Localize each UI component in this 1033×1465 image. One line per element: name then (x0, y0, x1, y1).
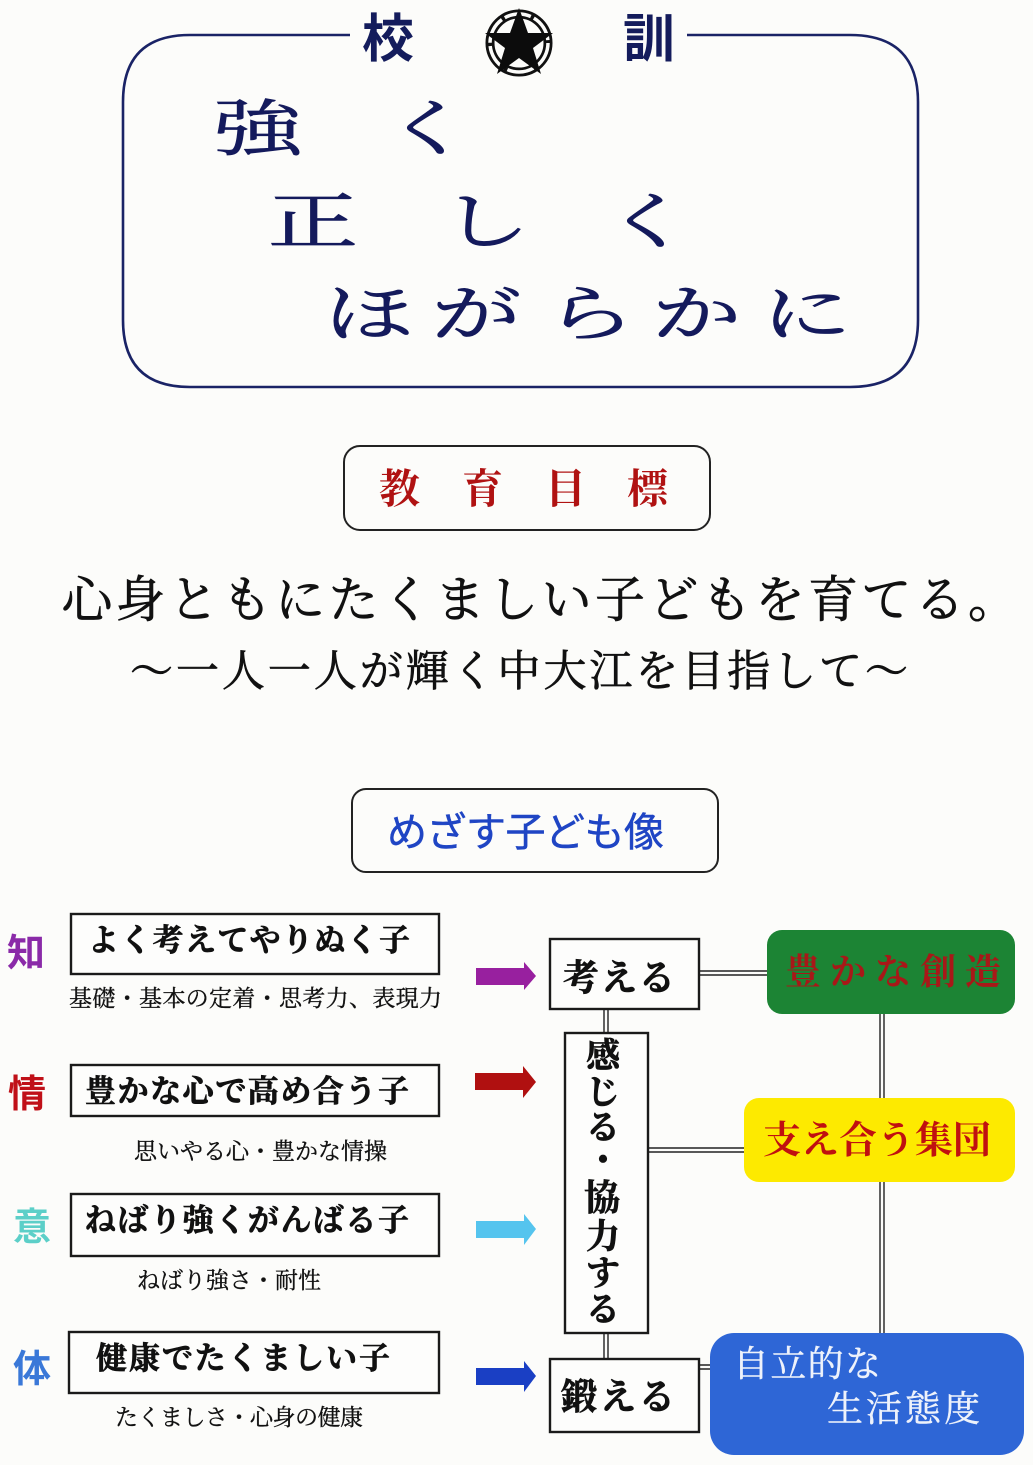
panel: 支え合う集団 (744, 1098, 1015, 1182)
heading box: めざす子ども像: めざす子ども像 (387, 811, 664, 855)
arrow (476, 1361, 536, 1392)
row: 情 (8, 1065, 536, 1164)
motto line 1: 強く (213, 95, 473, 164)
row: 意 (13, 1194, 536, 1293)
box: 考える: 考える (563, 958, 675, 998)
motto line 2: 正しく (268, 188, 693, 257)
box: 鍛える: 鍛える (561, 1377, 675, 1417)
row: 体 (13, 1332, 536, 1430)
caption: 基礎・基本の定着・思考力、表現力 (69, 986, 442, 1011)
box: 感じる・協力する: る (586, 1292, 620, 1329)
label 意: 意 (13, 1207, 51, 1249)
box: 考える (550, 939, 699, 1009)
box: 豊かな心で高め合う子 (71, 1065, 439, 1116)
row: 知 (7, 914, 536, 1011)
caption: 思いやる心・豊かな情操 (134, 1139, 387, 1164)
box: よく考えてやりぬく子 (71, 914, 439, 974)
box: 感じる・協力する: 感 (586, 1037, 623, 1075)
heading box: めざす子ども像 (352, 789, 718, 872)
heading: 訓: 訓 (623, 11, 675, 69)
box: 鍛える (550, 1359, 699, 1432)
arrow (476, 1214, 536, 1245)
panel: 豊かな創造: 豊かな創造 (785, 952, 1001, 992)
label 知: 知 (7, 933, 45, 975)
caption: ねばり強さ・耐性 (137, 1268, 321, 1293)
box: 感じる・協力する: る (586, 1110, 620, 1147)
connector lines (604, 971, 884, 1369)
label 情: 情 (8, 1074, 46, 1116)
caption: たくましさ・心身の健康 (115, 1405, 363, 1430)
box: ねばり強くがんばる子 (71, 1194, 439, 1256)
motto panel (123, 8, 918, 387)
arrow (476, 962, 536, 990)
panel: 支え合う集団: 支え合う集団 (763, 1120, 991, 1162)
box: 感じる・協力する: 力 (586, 1218, 620, 1256)
box: 感じる・協力する: じ (586, 1075, 620, 1112)
box: 感じる・協力する: す (586, 1256, 620, 1293)
motto line 3: ほがらかに (324, 280, 851, 349)
box: 感じる・協力する: ・ (586, 1143, 620, 1180)
arrow (475, 1066, 536, 1098)
educational goal: 心身ともにたくましい子どもを育てる。 (62, 572, 1018, 628)
goal subtitle: ～一人一人が輝く中大江を目指して～ (130, 649, 908, 696)
panel: 豊かな創造 (767, 930, 1015, 1014)
row: 意: ねばり強くがんばる子 (85, 1203, 409, 1238)
box: 感じる・協力する: 協 (584, 1178, 620, 1218)
row: 情: 豊かな心で高め合う子 (85, 1074, 409, 1109)
panel: 自立的な生活態度: 自立的な (733, 1344, 881, 1384)
panel: 自立的な生活態度 (710, 1333, 1024, 1455)
heading box: 教育目標: 教育目標 (379, 466, 671, 512)
row: 知: よく考えてやりぬく子 (88, 923, 410, 958)
heading box: 教育目標 (344, 446, 710, 530)
panel: 自立的な生活態度: 生活態度 (827, 1389, 980, 1429)
box: 感じる・協力する (565, 1033, 648, 1333)
box: 健康でたくましい子 (69, 1332, 439, 1393)
row: 体: 健康でたくましい子 (96, 1341, 390, 1376)
icon: school emblem (485, 8, 553, 74)
heading: 校: 校 (362, 11, 414, 69)
label 体: 体 (13, 1349, 51, 1391)
